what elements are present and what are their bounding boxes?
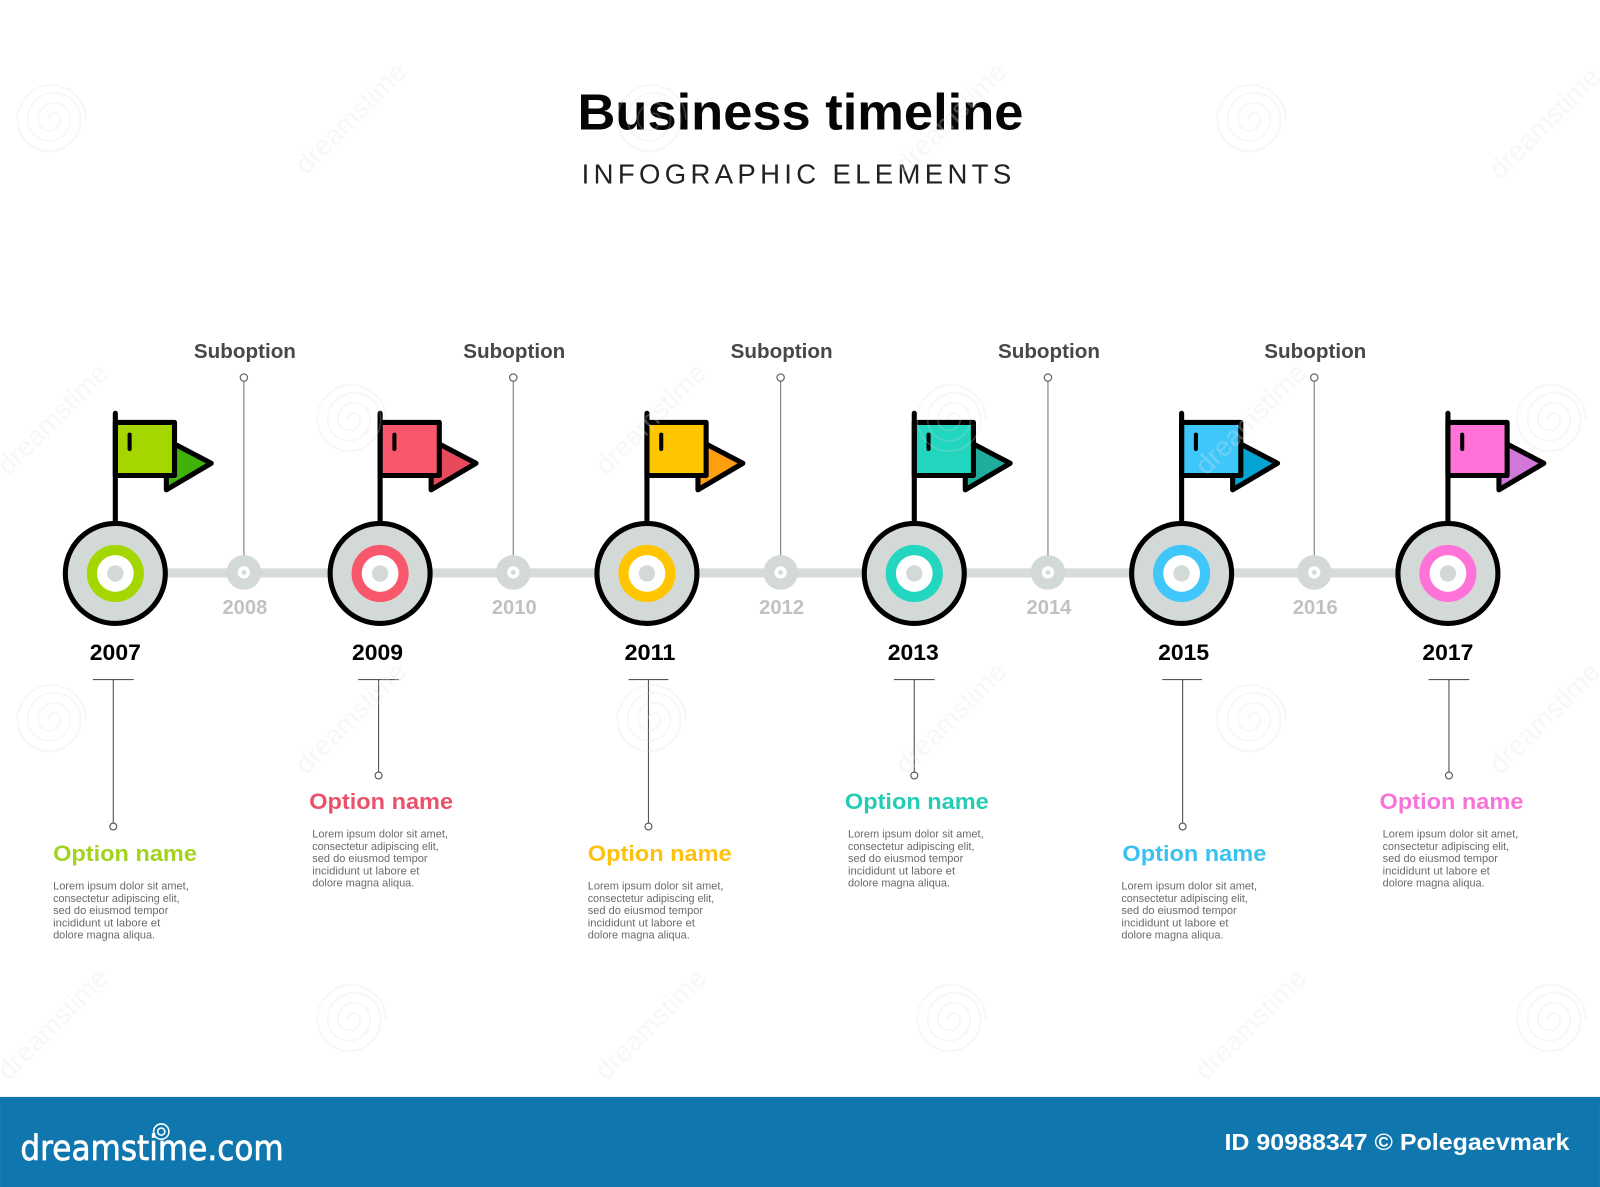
milestone 2009: [309, 413, 476, 890]
watermark text: dreamstime: [889, 56, 1012, 180]
description: [848, 829, 984, 890]
suboption 2012: Suboption: [731, 341, 833, 363]
description: consectetur adipiscing elit,: [1383, 841, 1509, 853]
icon: teal flag: [914, 413, 1010, 522]
option name: Option name: [309, 789, 453, 814]
footer logo: dreamstime.com: [20, 1129, 284, 1169]
connector: [93, 680, 134, 830]
description: Lorem ipsum dolor sit amet,: [588, 881, 723, 893]
suboption 2010: 2010: [492, 597, 537, 619]
description: incididunt ut labore et: [588, 917, 696, 929]
description: incididunt ut labore et: [1121, 917, 1229, 929]
description: [312, 829, 448, 890]
year: 2011: [624, 640, 676, 665]
description: consectetur adipiscing elit,: [1121, 893, 1248, 905]
suboption 2014: 2014: [1027, 597, 1072, 619]
description: incididunt ut labore et: [1383, 865, 1491, 877]
suboption 2010: [463, 341, 565, 619]
suboption 2016: Suboption: [1264, 341, 1366, 363]
description: [588, 881, 723, 942]
footer band: [0, 1097, 1600, 1187]
suboption 2014: Suboption: [998, 341, 1100, 363]
footer credit: ID 90988347 © Polegaevmark: [1224, 1129, 1570, 1155]
icon: yellow flag: [647, 413, 743, 522]
suboption 2012: 2012: [759, 597, 804, 619]
description: Lorem ipsum dolor sit amet,: [848, 829, 984, 841]
milestone 2015: [1121, 413, 1278, 942]
title: Business timeline: [578, 84, 1023, 141]
icon: target: [65, 523, 165, 623]
description: [1383, 829, 1518, 890]
milestone 2007: [53, 413, 211, 942]
subtitle: INFOGRAPHIC ELEMENTS: [582, 159, 1011, 190]
connector: [1429, 680, 1469, 779]
connector: [629, 680, 668, 830]
description: consectetur adipiscing elit,: [588, 893, 714, 905]
description: incididunt ut labore et: [312, 865, 420, 877]
suboption 2008: 2008: [222, 597, 267, 619]
description: incididunt ut labore et: [53, 917, 161, 929]
icon: green flag: [115, 413, 211, 522]
timeline bar: [115, 568, 1448, 578]
description: dolore magna aliqua.: [312, 878, 414, 890]
suboption 2012: [731, 341, 833, 619]
suboption 2016: [1264, 341, 1366, 619]
icon: target: [864, 523, 964, 623]
watermark text: dreamstime: [589, 962, 712, 1086]
icon: target: [330, 523, 430, 623]
icon: blue flag: [1182, 413, 1278, 522]
description: consectetur adipiscing elit,: [312, 841, 439, 853]
description: consectetur adipiscing elit,: [53, 893, 180, 905]
icon: target: [1132, 523, 1232, 623]
description: Lorem ipsum dolor sit amet,: [53, 881, 189, 893]
year: 2015: [1158, 640, 1209, 665]
description: sed do eiusmod tempor: [588, 905, 703, 917]
watermark spirals: [17, 85, 1586, 1051]
description: sed do eiusmod tempor: [848, 853, 964, 865]
suboption 2016: 2016: [1293, 597, 1338, 619]
connector: [894, 680, 935, 779]
icon: target: [597, 523, 697, 623]
description: dolore magna aliqua.: [1383, 878, 1485, 890]
description: [1121, 881, 1257, 942]
year: 2009: [352, 640, 403, 665]
description: Lorem ipsum dolor sit amet,: [312, 829, 448, 841]
year: 2017: [1422, 640, 1473, 665]
description: dolore magna aliqua.: [1121, 930, 1223, 942]
description: [53, 881, 189, 942]
option name: Option name: [1380, 789, 1523, 814]
description: dolore magna aliqua.: [848, 878, 950, 890]
suboption 2014: [998, 341, 1100, 619]
milestone 2011: [588, 413, 743, 942]
connector: [358, 680, 399, 779]
description: sed do eiusmod tempor: [312, 853, 428, 865]
description: dolore magna aliqua.: [588, 930, 690, 942]
suboption 2008: [194, 341, 296, 619]
description: Lorem ipsum dolor sit amet,: [1383, 829, 1518, 841]
milestone 2017: [1380, 413, 1544, 890]
description: Lorem ipsum dolor sit amet,: [1121, 881, 1257, 893]
suboption 2008: Suboption: [194, 341, 296, 363]
option name: Option name: [845, 789, 989, 814]
description: sed do eiusmod tempor: [1121, 905, 1237, 917]
description: sed do eiusmod tempor: [53, 905, 169, 917]
description: consectetur adipiscing elit,: [848, 841, 974, 853]
year: 2013: [888, 640, 939, 665]
description: dolore magna aliqua.: [53, 930, 155, 942]
suboption 2010: Suboption: [463, 341, 565, 363]
icon: pink flag: [1448, 413, 1544, 522]
option name: Option name: [53, 841, 197, 866]
year: 2007: [90, 640, 141, 665]
watermark text: dreamstime: [589, 357, 712, 481]
milestone 2013: [845, 413, 1010, 890]
icon: red flag: [380, 413, 476, 522]
option name: Option name: [588, 841, 732, 866]
option name: Option name: [1122, 841, 1266, 866]
icon: logo spiral: [154, 1124, 169, 1139]
watermark text: dreamstime: [289, 56, 412, 180]
watermark text: dreamstime: [889, 656, 1012, 780]
description: sed do eiusmod tempor: [1383, 853, 1498, 865]
watermark text: dreamstime: [1189, 962, 1312, 1086]
connector: [1162, 680, 1202, 830]
description: incididunt ut labore et: [848, 865, 956, 877]
icon: target: [1398, 523, 1498, 623]
watermark text: dreamstime: [1189, 357, 1312, 481]
watermark text: dreamstime: [289, 656, 412, 780]
